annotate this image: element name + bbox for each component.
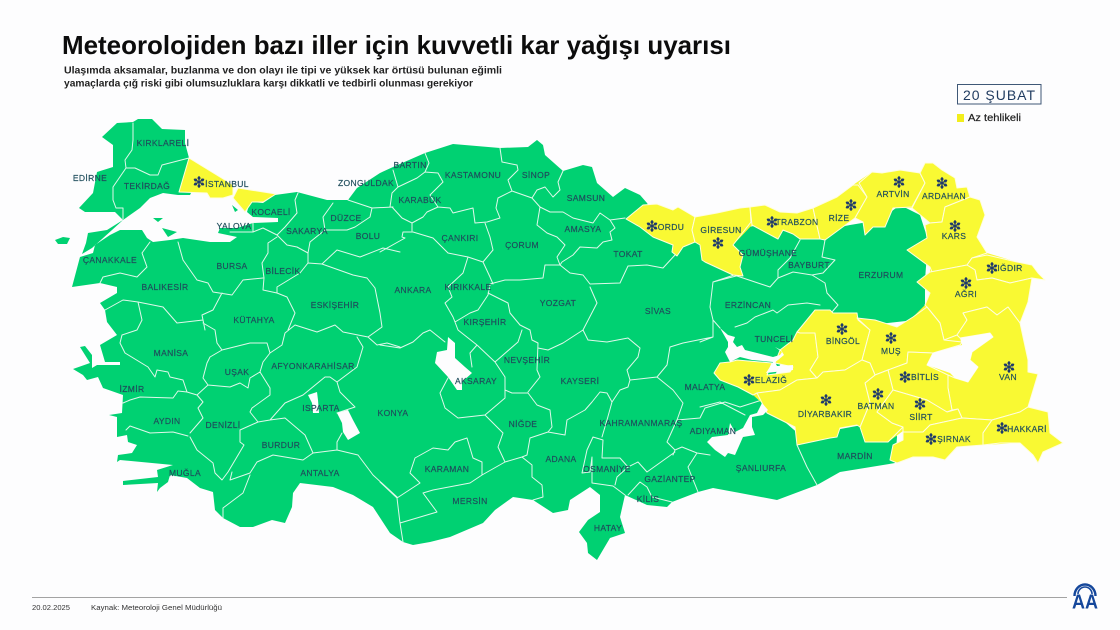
province: Trabzon — [750, 205, 820, 239]
province: Ordu — [626, 204, 695, 256]
province labels: OSMANİYE — [583, 464, 631, 474]
province: Şırnak — [890, 418, 992, 463]
province labels: IĞDIR — [997, 263, 1023, 273]
icon: snowflake Bingöl — [837, 324, 847, 334]
province labels: ZONGULDAK — [338, 178, 394, 188]
province: Batman — [860, 370, 903, 442]
icon: snowflake Ağrı — [961, 278, 971, 288]
province labels: GİRESUN — [700, 225, 742, 235]
province labels: UŞAK — [225, 367, 249, 377]
icon: snowflake Ordu — [647, 221, 657, 231]
icon: snowflake Hakkari — [997, 423, 1007, 433]
province labels: DİYARBAKIR — [798, 409, 852, 419]
province labels: SAMSUN — [567, 193, 605, 203]
legend: Az tehlikeli — [968, 113, 1021, 124]
lake: Atatürk dam — [707, 403, 768, 457]
province: Van — [948, 307, 1038, 420]
province labels: BURSA — [216, 261, 248, 271]
subtitle — [64, 66, 502, 90]
province labels: RİZE — [829, 213, 849, 223]
date box: 20 ŞUBAT — [963, 87, 1035, 103]
icon: snowflake Bitlis — [900, 372, 910, 382]
province: Rize — [813, 185, 867, 240]
footer source: Kaynak: Meteoroloji Genel Müdürlüğü — [91, 603, 222, 612]
province labels: AMASYA — [565, 224, 601, 234]
province labels: KOCAELİ — [251, 207, 291, 217]
yellow warning area underlay — [626, 163, 1063, 463]
title: Meteorolojiden bazı iller için kuvvetli kar yağışı uyarısı — [62, 30, 731, 60]
province labels: ANTALYA — [300, 468, 340, 478]
icon: snowflake Kars — [950, 221, 960, 231]
province labels: DÜZCE — [330, 213, 362, 223]
province labels: KASTAMONU — [445, 170, 501, 180]
province labels: GAZİANTEP — [644, 474, 696, 484]
province labels — [73, 138, 1047, 533]
province labels: BARTIN — [393, 160, 427, 170]
province labels: ELAZIĞ — [755, 375, 787, 385]
icon: snowflake Giresun — [713, 238, 723, 248]
province labels: BATMAN — [858, 401, 894, 411]
province labels: SİNOP — [522, 170, 550, 180]
province labels: KARS — [942, 231, 966, 241]
province labels: ERZURUM — [859, 270, 903, 280]
icon: snowflake Batman — [873, 389, 883, 399]
subtitle: yamaçlarda çığ riski gibi olumsuzluklara karşı dikkatli ve tedbirli olunması gerekiyor — [64, 78, 473, 90]
province labels: NEVŞEHİR — [504, 355, 550, 365]
lake: Keban — [720, 328, 793, 373]
icon: snowflake Elazığ — [744, 375, 754, 385]
province labels: MUĞLA — [169, 468, 201, 478]
province labels: ADIYAMAN — [690, 426, 736, 436]
province labels: GÜMÜŞHANE — [739, 248, 797, 258]
province labels: MARDİN — [837, 451, 873, 461]
province: İstanbul — [179, 158, 276, 212]
province: Ardahan — [912, 163, 970, 223]
province labels: NİĞDE — [509, 419, 537, 429]
icon: snowflake Ardahan — [937, 178, 947, 188]
logo: AA — [1072, 584, 1098, 614]
province labels: ADANA — [545, 454, 577, 464]
province labels: BOLU — [356, 231, 380, 241]
province labels: ESKİŞEHİR — [311, 300, 359, 310]
province labels: YALOVA — [217, 221, 251, 231]
province labels: BAYBURT — [788, 260, 830, 270]
icon: snowflake Trabzon — [767, 217, 777, 227]
province labels: KİLİS — [637, 494, 659, 504]
province labels: ISPARTA — [302, 403, 340, 413]
province: Ağrı — [917, 265, 1032, 340]
province labels: KONYA — [378, 408, 408, 418]
lake: Beyşehir — [337, 410, 360, 440]
province labels: ARTVİN — [876, 189, 910, 199]
province labels: KÜTAHYA — [233, 315, 275, 325]
province: Iğdır — [967, 255, 1045, 283]
province labels: KIRŞEHİR — [464, 317, 506, 327]
province: Hakkari — [983, 407, 1063, 463]
province labels: TRABZON — [775, 217, 819, 227]
lake: Tuz — [435, 337, 472, 390]
icon: snowflake Şırnak — [926, 434, 936, 444]
province labels: BALIKESİR — [141, 282, 189, 292]
province labels: İZMİR — [120, 384, 144, 394]
footer rule — [32, 596, 1067, 598]
province labels: ERZİNCAN — [725, 300, 771, 310]
province labels: DENİZLİ — [205, 420, 241, 430]
province: Bingöl — [797, 310, 870, 378]
province labels: ORDU — [658, 222, 684, 232]
province labels: BİLECİK — [265, 266, 301, 276]
icon: snowflake Rize — [846, 200, 856, 210]
icon: snowflake Artvin — [894, 177, 904, 187]
province labels: SİİRT — [909, 412, 933, 422]
province labels: MUŞ — [881, 346, 901, 356]
province labels: KARAMAN — [425, 464, 469, 474]
province labels: İSTANBUL — [205, 179, 249, 189]
province: Siirt — [877, 390, 962, 432]
province labels: ARDAHAN — [922, 191, 966, 201]
province labels: ÇANKIRI — [442, 233, 478, 243]
province labels: ÇANAKKALE — [83, 255, 137, 265]
footer date: 20.02.2025 — [32, 603, 70, 612]
province labels: MERSİN — [452, 496, 488, 506]
province labels: ŞANLIURFA — [736, 463, 786, 473]
lake: Eğirdir — [308, 392, 319, 413]
icon: snowflake Van — [1004, 362, 1014, 372]
province labels: VAN — [999, 372, 1017, 382]
province labels: MALATYA — [685, 382, 725, 392]
province labels: ÇORUM — [505, 240, 539, 250]
province labels: ŞIRNAK — [937, 434, 971, 444]
province labels: TUNCELİ — [755, 334, 793, 344]
province labels: AFYONKARAHİSAR — [271, 361, 355, 371]
province labels: EDİRNE — [73, 173, 107, 183]
province labels: SİVAS — [645, 306, 671, 316]
province borders — [100, 123, 838, 542]
province labels: TEKİRDAĞ — [124, 181, 170, 191]
province labels: KAHRAMANMARAŞ — [600, 418, 682, 428]
province labels: KARABÜK — [398, 195, 442, 205]
province: Artvin — [855, 170, 925, 235]
icon: snowflake Muş — [886, 333, 896, 343]
icon: snowflake Siirt — [915, 399, 925, 409]
province labels: SAKARYA — [286, 226, 328, 236]
icon: snowflake Diyarbakır — [821, 395, 831, 405]
province labels: AKSARAY — [455, 376, 497, 386]
province labels: ANKARA — [394, 285, 432, 295]
province labels: HATAY — [594, 523, 622, 533]
province labels: YOZGAT — [540, 298, 576, 308]
province labels: HAKKARİ — [1007, 424, 1047, 434]
province labels: AĞRI — [955, 289, 977, 299]
province labels: KIRIKKALE — [444, 282, 492, 292]
lake: Van — [927, 333, 993, 382]
province labels: AYDIN — [153, 416, 181, 426]
province labels: BURDUR — [262, 440, 300, 450]
snowflake icons — [194, 177, 1014, 444]
province labels: MANİSA — [154, 348, 188, 358]
province: Elazığ — [714, 332, 818, 395]
province labels: KAYSERİ — [561, 376, 599, 386]
icon: snowflake İstanbul — [194, 177, 204, 187]
province labels: BİNGÖL — [826, 336, 860, 346]
icon: snowflake Iğdır — [987, 263, 997, 273]
province: Giresun — [692, 207, 751, 276]
map of Turkey — [55, 119, 1063, 560]
province: Diyarbakır — [757, 360, 875, 445]
province: Muş — [857, 307, 962, 375]
province: Bitlis — [888, 352, 952, 412]
subtitle: Ulaşımda aksamalar, buzlanma ve don olayı ile tipi ve yüksek kar örtüsü bulunan eğimli — [64, 66, 502, 76]
land: green silhouette — [55, 119, 928, 560]
logo: AA: AA — [1072, 592, 1098, 614]
province labels: TOKAT — [613, 249, 643, 259]
lakes — [308, 328, 993, 457]
province: Kars — [907, 197, 987, 272]
province labels: KIRKLARELİ — [137, 138, 189, 148]
province labels: BİTLİS — [911, 372, 939, 382]
